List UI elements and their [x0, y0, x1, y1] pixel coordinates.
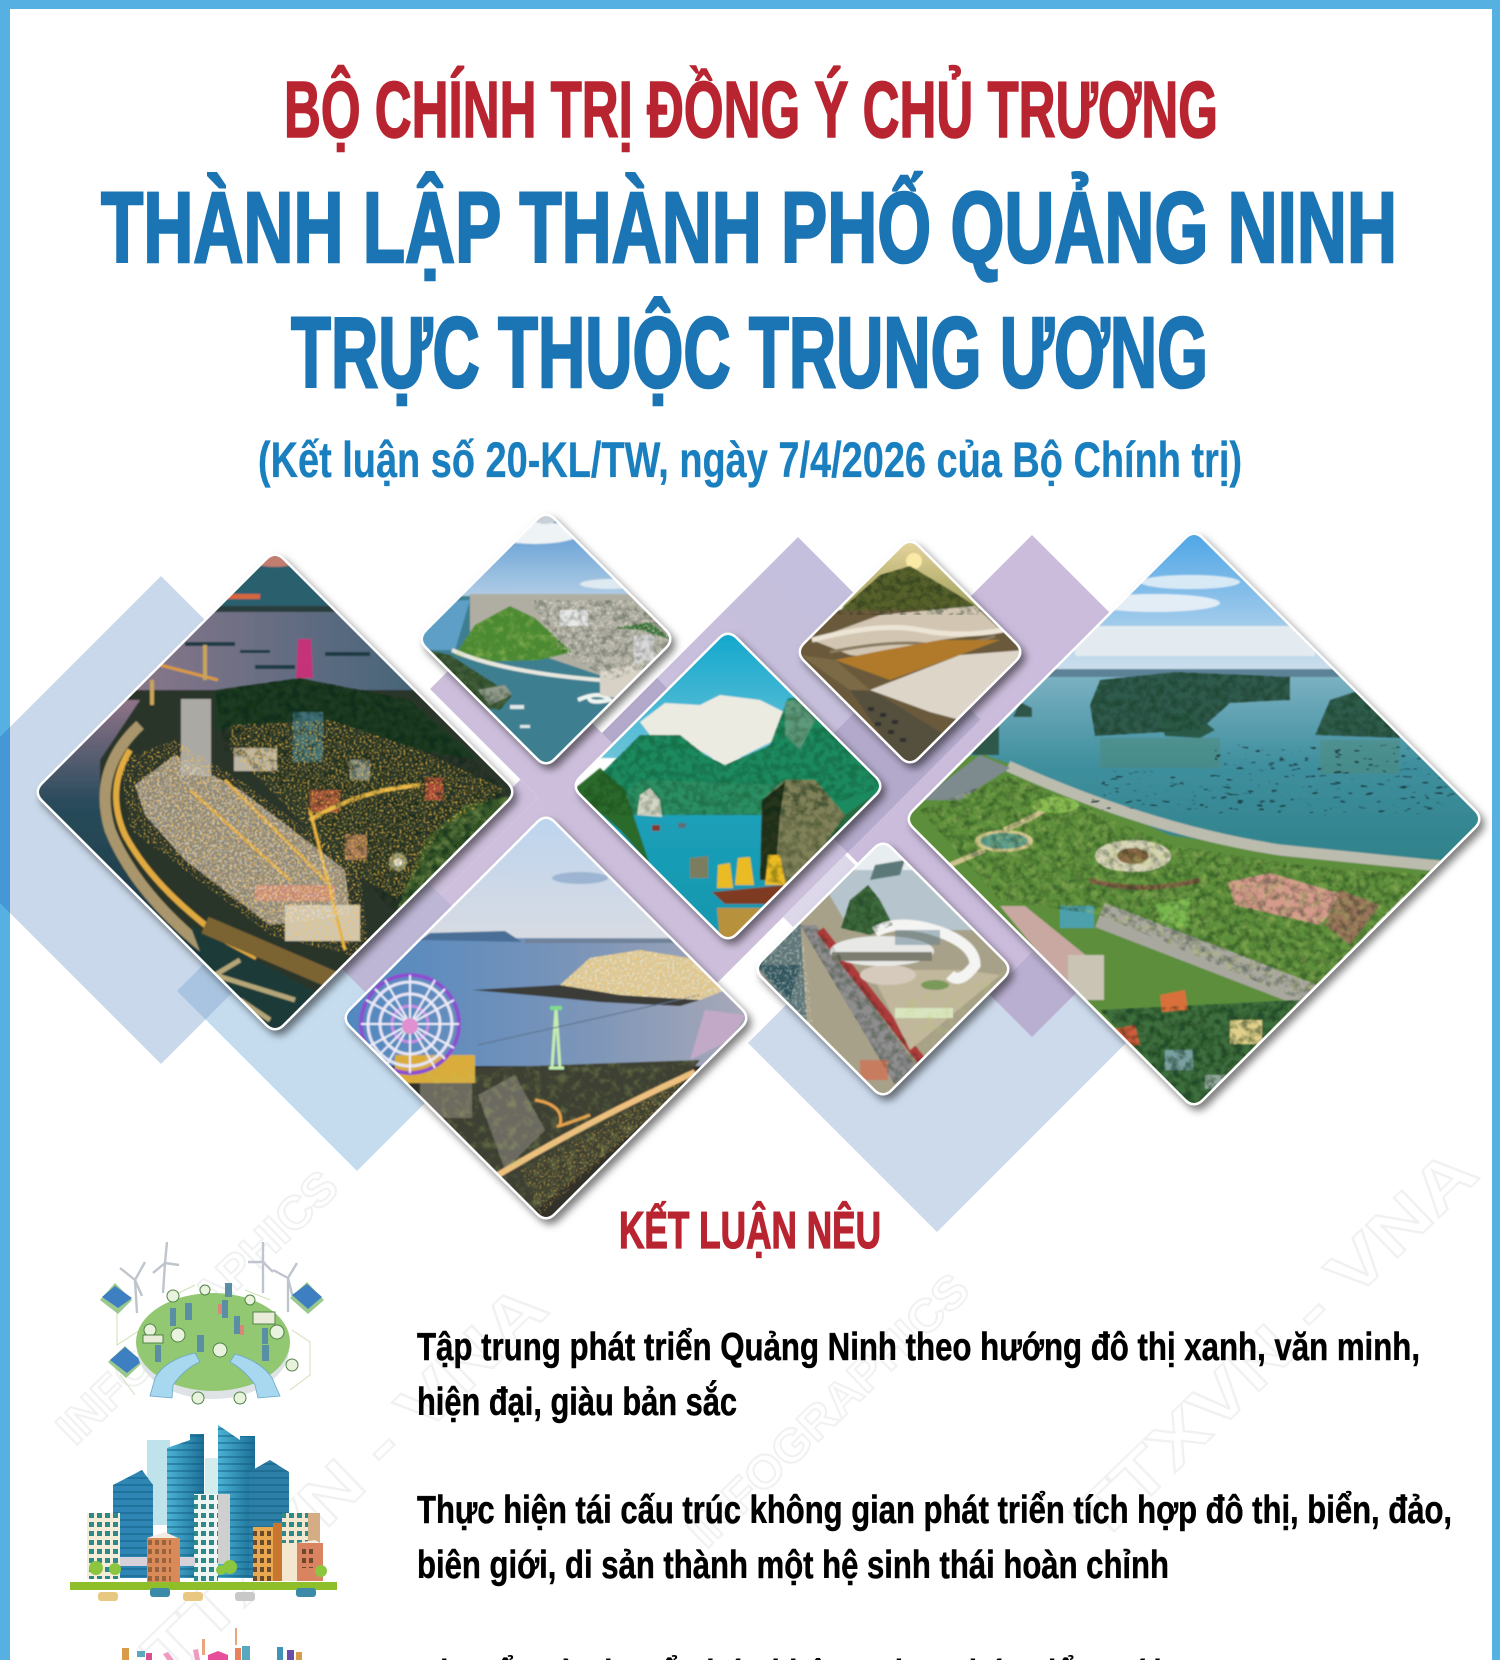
- photo: park and ha long bay: [900, 528, 1490, 1110]
- icon: green eco city: [100, 1242, 324, 1404]
- watermarks: INFOGRAPHICS: [677, 1263, 979, 1557]
- photo: night city: [30, 537, 520, 1040]
- photo: airport terminal: [795, 537, 1025, 770]
- text: item 1: hiện đại, giàu bản sắc: [417, 1380, 737, 1424]
- photo: ferris wheel bay: [340, 812, 752, 1225]
- icon: city skyline: [70, 1425, 337, 1601]
- watermarks: TTXVN - VNA: [1058, 1134, 1491, 1555]
- text: item 2: biên giới, di sản thành một hệ sinh thái hoàn chỉnh: [417, 1544, 1169, 1587]
- text: item 1: [417, 1326, 1420, 1424]
- photo: bay and hill: [415, 510, 677, 771]
- photo: stadium: [752, 838, 1014, 1100]
- background diamonds: [0, 535, 1283, 1232]
- watermarks: [46, 1134, 1491, 1660]
- text: item 2: [417, 1489, 1452, 1587]
- icon: people and culture: [122, 1628, 302, 1660]
- photo: ha long junk: [570, 628, 888, 945]
- heading: conclusions: KẾT LUẬN NÊU: [619, 1201, 881, 1260]
- watermarks: INFOGRAPHICS: [46, 1160, 348, 1454]
